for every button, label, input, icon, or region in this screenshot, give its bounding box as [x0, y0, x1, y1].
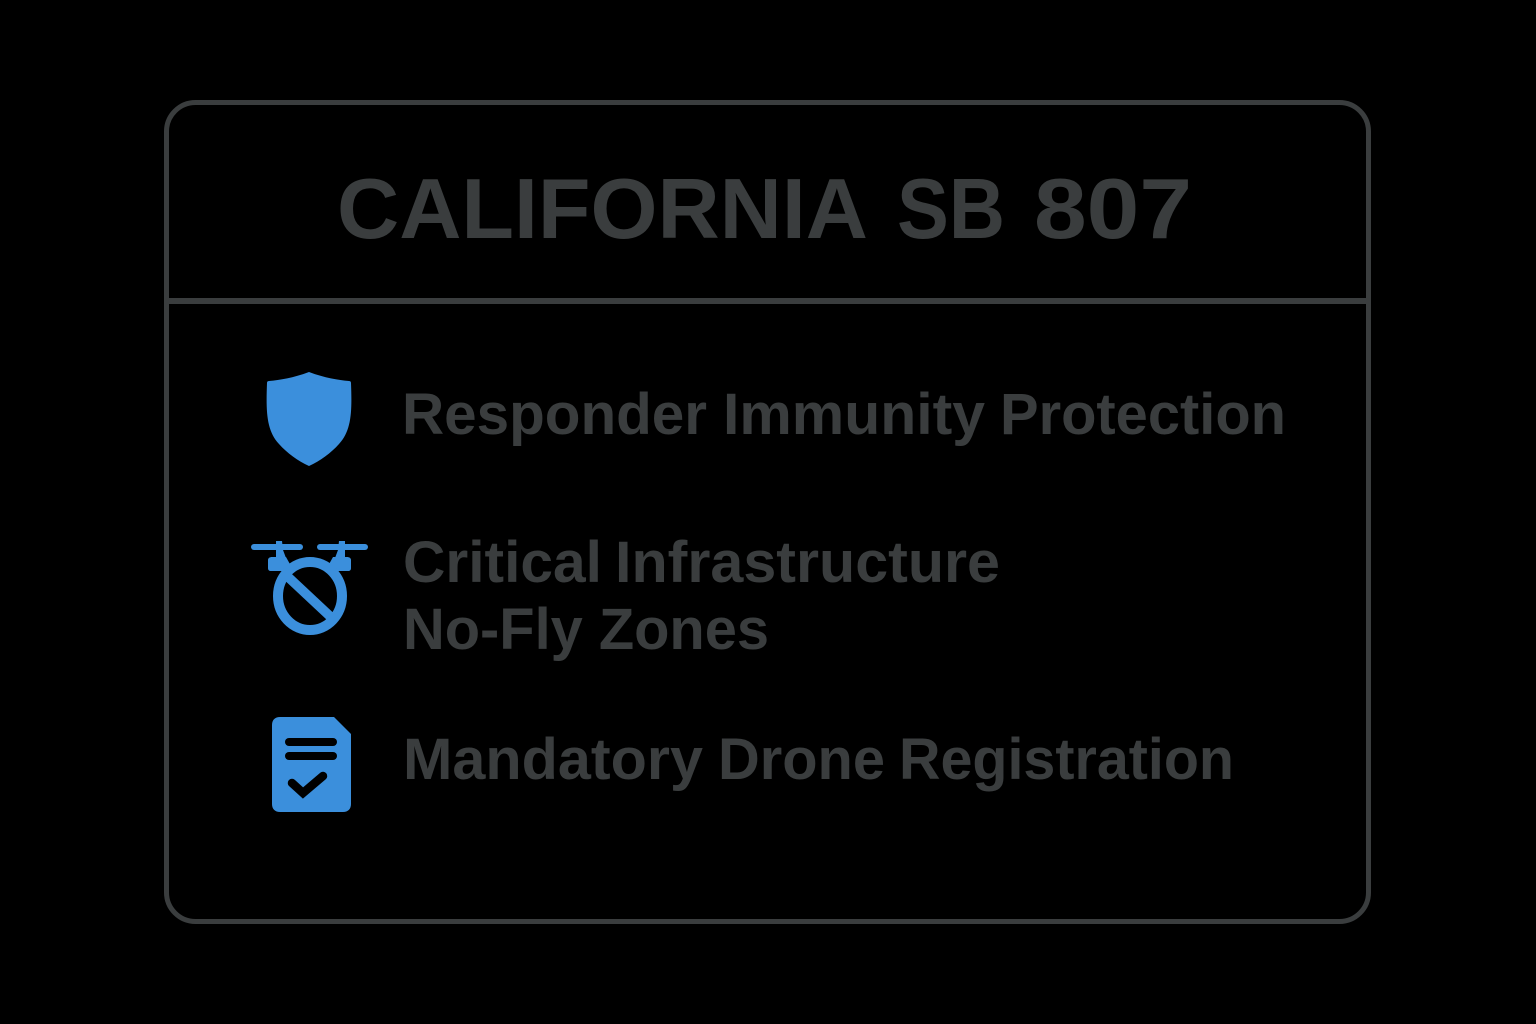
- text: critical infrastructure no-fly zones: No-Fly Zones: [403, 597, 769, 662]
- title: CALIFORNIA: [337, 162, 868, 257]
- text: critical infrastructure no-fly zones: [403, 530, 1000, 662]
- text: responder immunity protection: [402, 382, 1286, 447]
- title divider: [168, 298, 1367, 304]
- text: mandatory drone registration: [403, 727, 1234, 792]
- text: mandatory drone registration: Mandatory: [403, 727, 703, 792]
- text: responder immunity protection: Protection: [1000, 382, 1286, 447]
- icon: shield: [267, 372, 351, 466]
- text: critical infrastructure no-fly zones: Infrastructure: [615, 530, 1000, 595]
- title: SB: [897, 162, 1005, 257]
- text: mandatory drone registration: Drone: [718, 727, 885, 792]
- icon: no-fly drone: [251, 541, 368, 630]
- text: critical infrastructure no-fly zones: Critical: [403, 530, 602, 595]
- text: responder immunity protection: Responder: [402, 382, 707, 447]
- panel: California SB 807 card: [166, 102, 1368, 922]
- text: responder immunity protection: Immunity: [723, 382, 985, 447]
- title: [337, 162, 1192, 257]
- icon: registration document: [272, 717, 351, 812]
- title: 807: [1034, 162, 1192, 257]
- text: mandatory drone registration: Registration: [899, 727, 1234, 792]
